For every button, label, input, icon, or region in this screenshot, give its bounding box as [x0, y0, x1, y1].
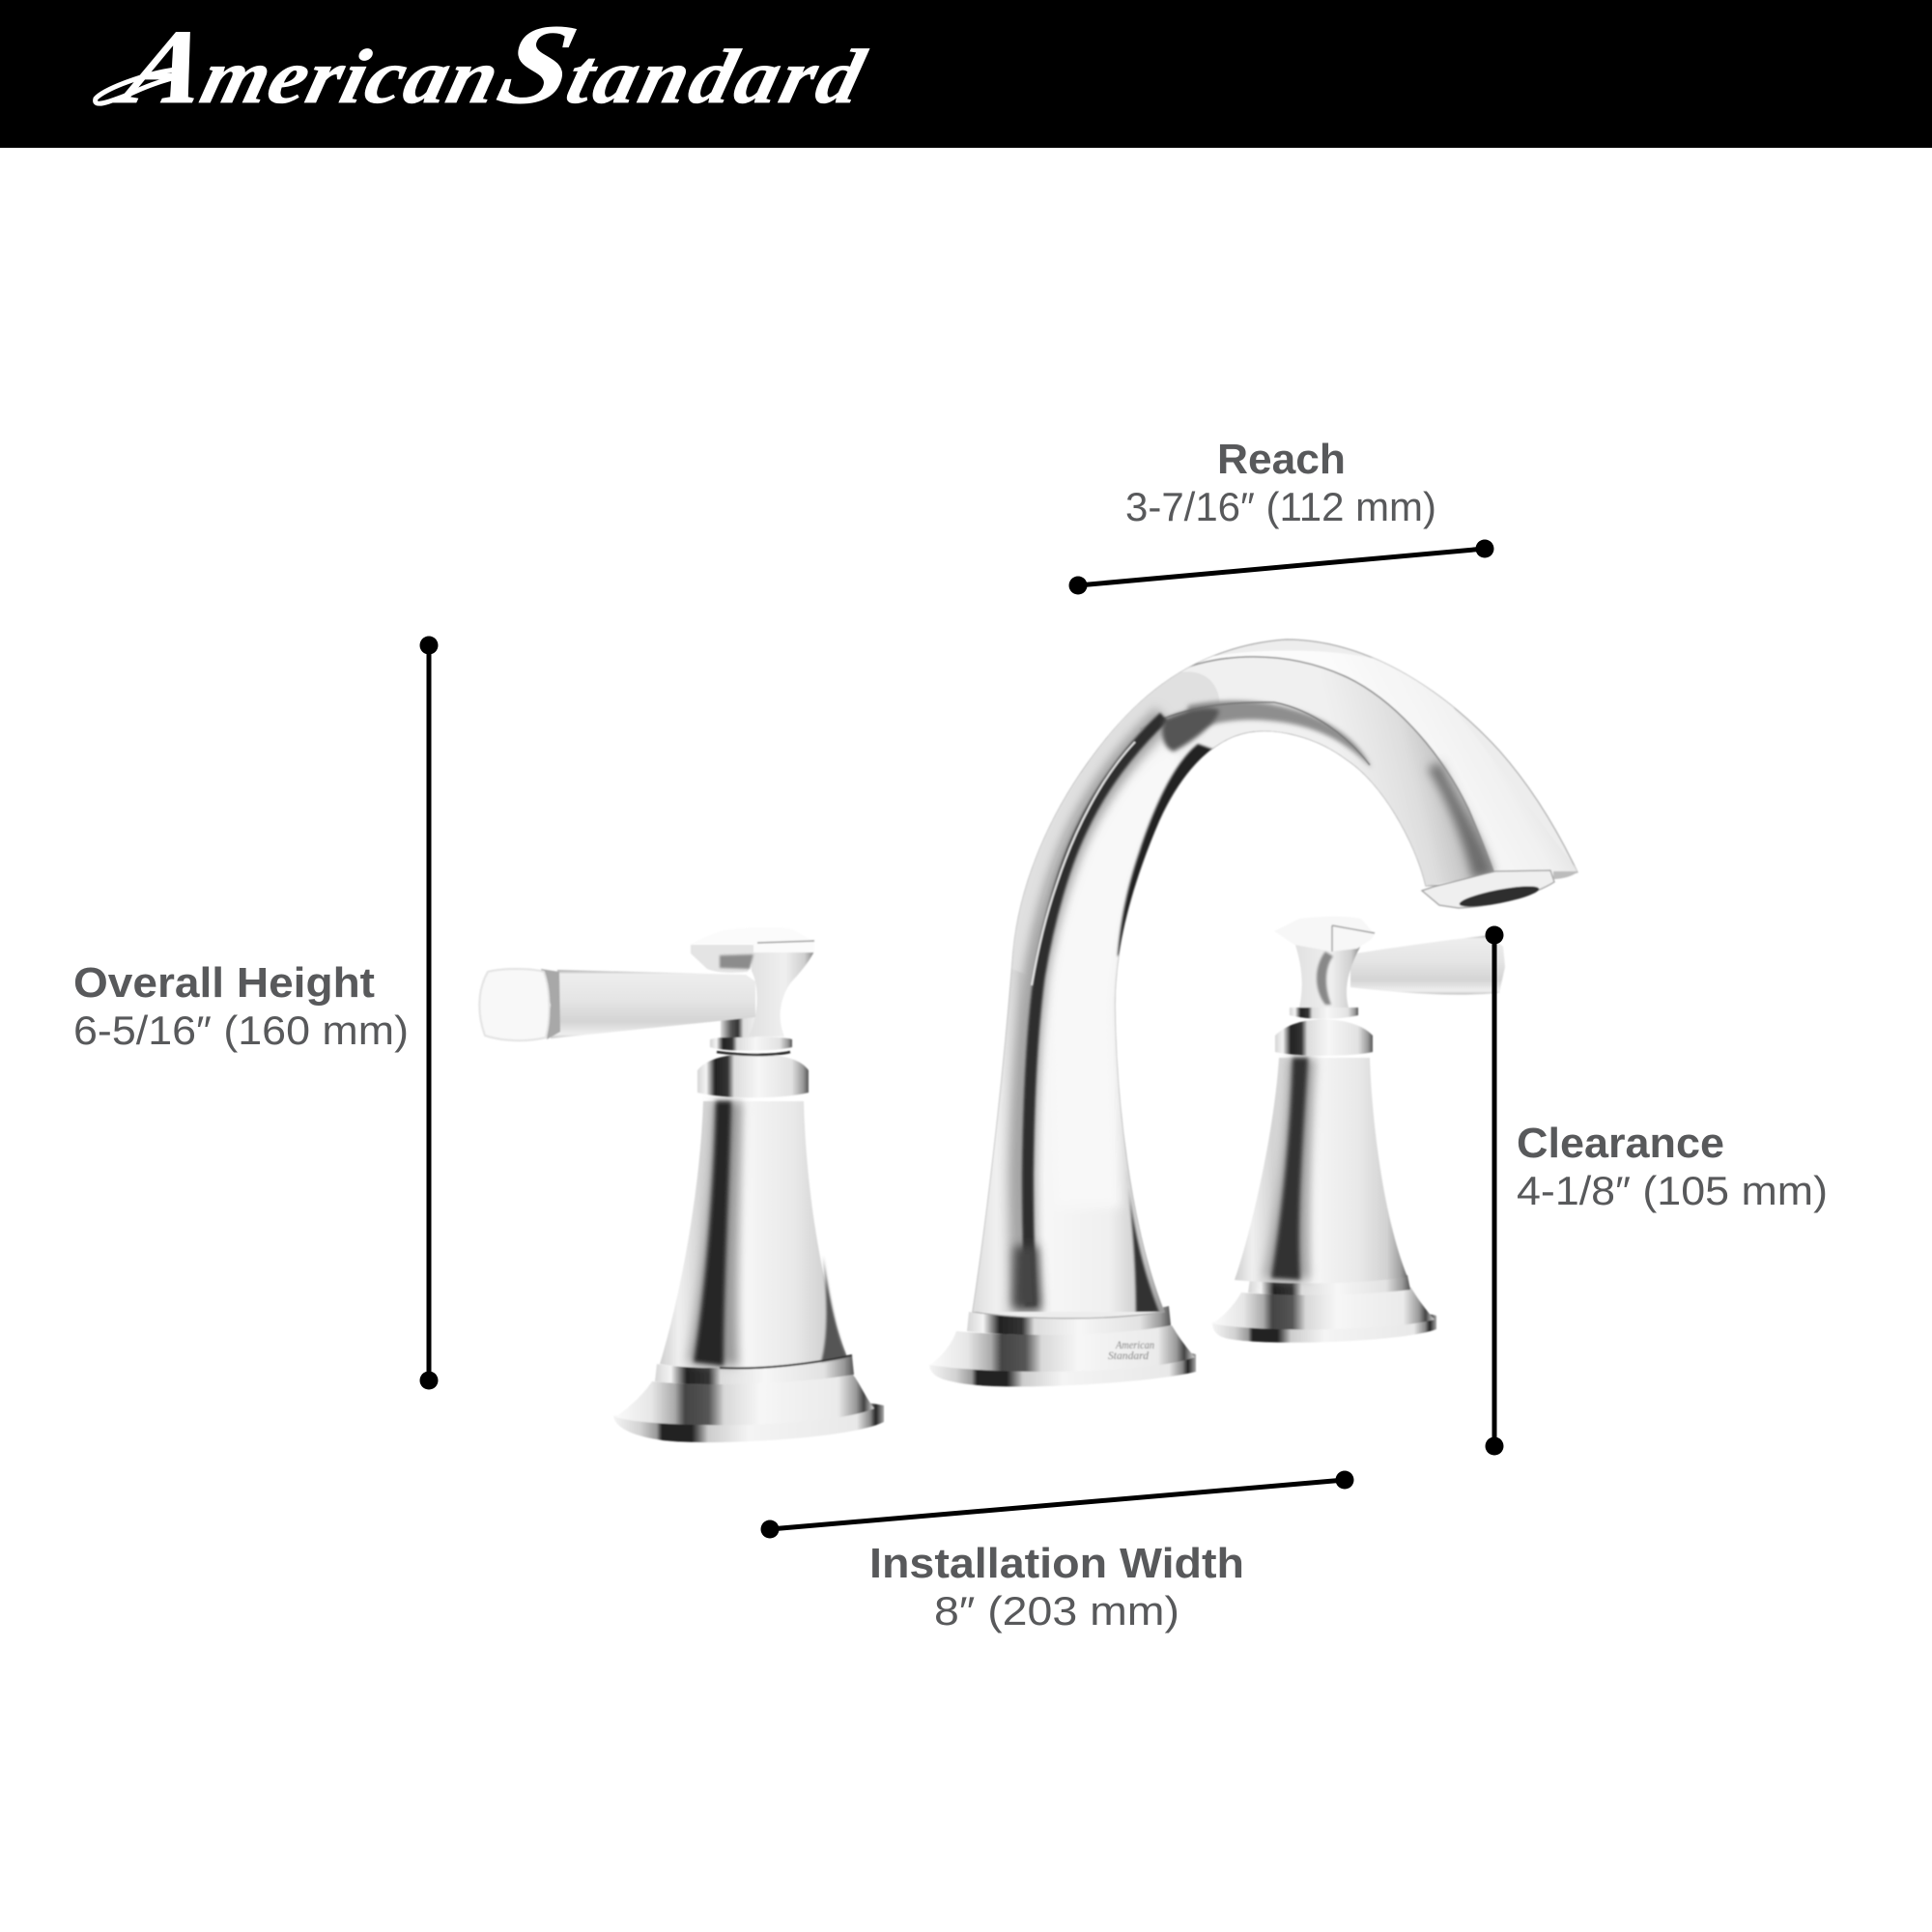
right handle lever	[1350, 935, 1505, 995]
clearance value: 4-1/8″ (105 mm)	[1517, 1168, 1828, 1213]
spout dark reflection	[1028, 717, 1164, 1306]
left handle base plate	[613, 1402, 884, 1442]
width end dot	[1335, 1470, 1354, 1490]
spout base dome	[930, 1325, 1195, 1372]
right handle neck reflection	[1317, 952, 1333, 1005]
header bar	[0, 0, 1932, 148]
spout bright slit in reflection	[1032, 742, 1135, 985]
engraved logo second line: Standard	[1108, 1349, 1150, 1362]
left handle	[479, 927, 884, 1442]
spout base plate	[929, 1351, 1196, 1386]
right handle knob edges	[1332, 925, 1375, 952]
right handle	[1212, 917, 1505, 1343]
engraved logo first line: American	[1115, 1338, 1154, 1351]
spout silhouette	[973, 639, 1577, 1319]
left handle upper ring	[697, 1053, 809, 1097]
reach label: Reach	[1217, 436, 1346, 483]
right handle ring	[1248, 1275, 1410, 1295]
reach value: 3-7/16″ (112 mm)	[1125, 484, 1436, 529]
width line	[770, 1480, 1345, 1529]
spout facet edge shadow	[1428, 763, 1493, 879]
height line	[427, 645, 431, 1380]
left handle ring shadow line	[720, 1355, 852, 1368]
height top dot	[419, 636, 439, 655]
spout base ring	[967, 1306, 1171, 1335]
spout outer crown	[1197, 651, 1577, 872]
spout inner crown	[1128, 667, 1493, 887]
left handle collar shadow	[717, 1052, 790, 1055]
dimension: overall height	[73, 636, 439, 1389]
right handle collar	[1290, 1008, 1358, 1019]
left handle bell	[660, 1101, 847, 1368]
right handle bell	[1235, 1058, 1407, 1283]
width label: Installation Width	[869, 1540, 1244, 1587]
spout gray reflection halo	[1022, 717, 1164, 1306]
left handle bell right edge shadow	[821, 1256, 846, 1362]
right handle dome	[1212, 1287, 1435, 1329]
height bottom dot	[419, 1372, 439, 1389]
left handle collar	[710, 1037, 792, 1051]
height value: 6-5/16″ (160 mm)	[73, 1008, 409, 1053]
clearance top dot	[1486, 925, 1503, 945]
spout top facet edge	[1170, 657, 1493, 871]
spout	[929, 639, 1584, 1386]
left handle ring	[655, 1355, 854, 1384]
aerator tab	[1553, 871, 1577, 879]
right handle neck	[1294, 942, 1361, 1008]
clearance bottom dot	[1486, 1437, 1503, 1455]
left handle bell dark reflection	[694, 1101, 731, 1366]
spout crease shading	[1183, 700, 1372, 768]
spout lower right shading	[1128, 1192, 1160, 1313]
spout crease line	[1140, 702, 1370, 765]
left handle lever end facet	[541, 969, 560, 1039]
spout lower dark bulge	[1012, 1246, 1041, 1312]
reach start dot	[1068, 576, 1088, 595]
spout tube highlight	[1108, 810, 1151, 1206]
spout left crown fill	[1005, 671, 1220, 976]
dimension: reach	[1068, 436, 1493, 595]
width value: 8″ (203 mm)	[934, 1588, 1179, 1634]
reach end dot	[1476, 539, 1493, 558]
spout inner dark streak	[1118, 744, 1219, 956]
left handle dome	[615, 1375, 874, 1425]
reach line	[1078, 549, 1485, 585]
left handle knob top	[691, 927, 814, 952]
aerator opening	[1458, 882, 1541, 911]
dimension: clearance	[1486, 925, 1828, 1455]
logo wordmark: AmericanStandard	[106, 2, 884, 128]
right handle bell soft shadow	[1264, 1058, 1316, 1280]
spout knot reflection	[1162, 708, 1219, 752]
spout reflections (clipped)	[966, 650, 1584, 1323]
left handle lever end cap	[479, 969, 550, 1040]
left handle knob left facet	[691, 945, 753, 973]
clearance line	[1492, 935, 1497, 1446]
left handle neck	[749, 952, 814, 1037]
faucet illustration	[479, 639, 1584, 1442]
left handle stem	[721, 1014, 755, 1037]
right handle upper ring	[1275, 1019, 1373, 1056]
left handle knob window	[720, 954, 753, 969]
left handle knob edge	[757, 941, 814, 943]
height label: Overall Height	[73, 959, 375, 1007]
aerator collar	[1422, 870, 1554, 908]
spout lower body	[972, 957, 1164, 1313]
dimension: installation width	[761, 1470, 1354, 1634]
right handle base plate	[1212, 1312, 1436, 1343]
right handle knob	[1274, 917, 1375, 952]
clearance label: Clearance	[1517, 1120, 1724, 1167]
left handle bell soft shadow	[688, 1101, 742, 1366]
left handle lever	[551, 970, 755, 1038]
logo swash	[96, 70, 184, 103]
width start dot	[761, 1520, 779, 1538]
right handle bell dark reflection	[1271, 1058, 1308, 1280]
